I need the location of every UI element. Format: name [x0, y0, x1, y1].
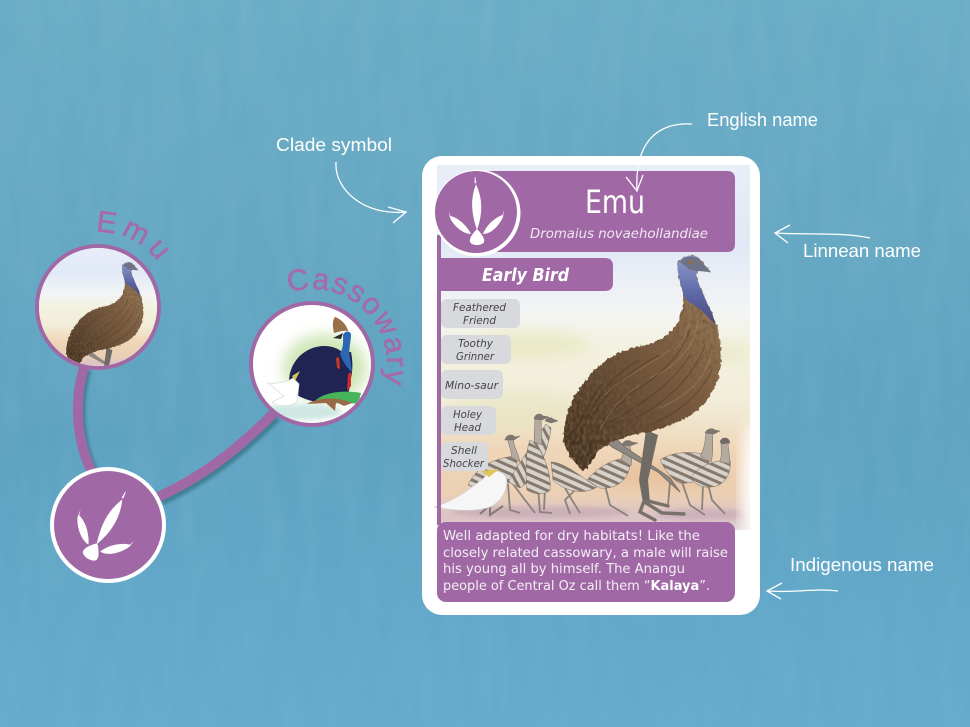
trait pill: Holey Head: Holey	[453, 408, 482, 421]
description panel: Well adapted for dry habitats! Like the	[443, 528, 700, 544]
arrow: Linnean name	[775, 225, 870, 243]
illustration: adult emu	[563, 256, 721, 520]
description panel: closely related cassowary, a male will raise	[443, 545, 728, 561]
arrow: clade symbol	[336, 162, 406, 223]
tree branch shadows	[81, 370, 277, 501]
trait pill: Shell Shocker: Shocker	[443, 457, 485, 470]
arrow: Indigenous name	[767, 583, 838, 599]
trait pill: Shell Shocker	[441, 442, 488, 471]
trait pill: Toothy Grinner: Toothy	[458, 337, 493, 350]
illustration: cockatoo	[434, 469, 507, 515]
trait pill: Holey Head	[441, 406, 496, 435]
description panel	[437, 522, 735, 602]
trait pill: Feathered Friend	[441, 299, 520, 328]
tree node: clade symbol	[52, 469, 164, 581]
tree node: emu portrait	[35, 244, 161, 370]
description panel: his young all by himself. The Anangu	[443, 561, 685, 577]
card illustration backdrop	[437, 165, 750, 530]
trait pill: Mino-saur: Mino-saur	[445, 379, 499, 392]
header band: purple name banner	[470, 171, 735, 252]
illustration: emu chicks	[468, 414, 730, 516]
tree branch: cassowary	[158, 413, 274, 497]
trait pill: Toothy Grinner: Grinner	[456, 350, 495, 363]
Linnean name: Dromaius novaehollandiae	[530, 226, 708, 242]
title tab: Early Bird	[437, 258, 613, 291]
clade symbol badge	[434, 170, 520, 256]
arrow: English name	[626, 124, 692, 191]
annotation: English name: English name	[707, 110, 818, 130]
tree node: cassowary portrait	[251, 303, 373, 425]
trait pill: Feathered Friend: Feathered	[453, 301, 507, 314]
title tab: Early Bird: Early Bird	[482, 265, 570, 286]
English name: Emu	[585, 183, 645, 221]
panel: trading card	[422, 156, 762, 615]
tree branch: emu	[78, 368, 92, 472]
trait pill: Feathered Friend: Friend	[463, 314, 497, 327]
curved label: Emu: Emu	[98, 210, 169, 260]
card side strip	[437, 235, 441, 525]
trait pill: Holey Head: Head	[454, 421, 482, 434]
annotation: Clade symbol: Clade symbol	[276, 135, 392, 155]
description panel: people of Central Oz call them “Kalaya”.	[443, 578, 710, 594]
trait pill: Shell Shocker: Shell	[451, 444, 477, 457]
curved label: Cassowary: Cassowary	[288, 268, 404, 386]
annotation: Linnean name: Linnean name	[803, 241, 921, 261]
trait pill: Mino-saur	[441, 370, 503, 399]
annotation: Indigenous name: Indigenous name	[790, 555, 934, 575]
trait pill: Toothy Grinner	[441, 335, 511, 364]
